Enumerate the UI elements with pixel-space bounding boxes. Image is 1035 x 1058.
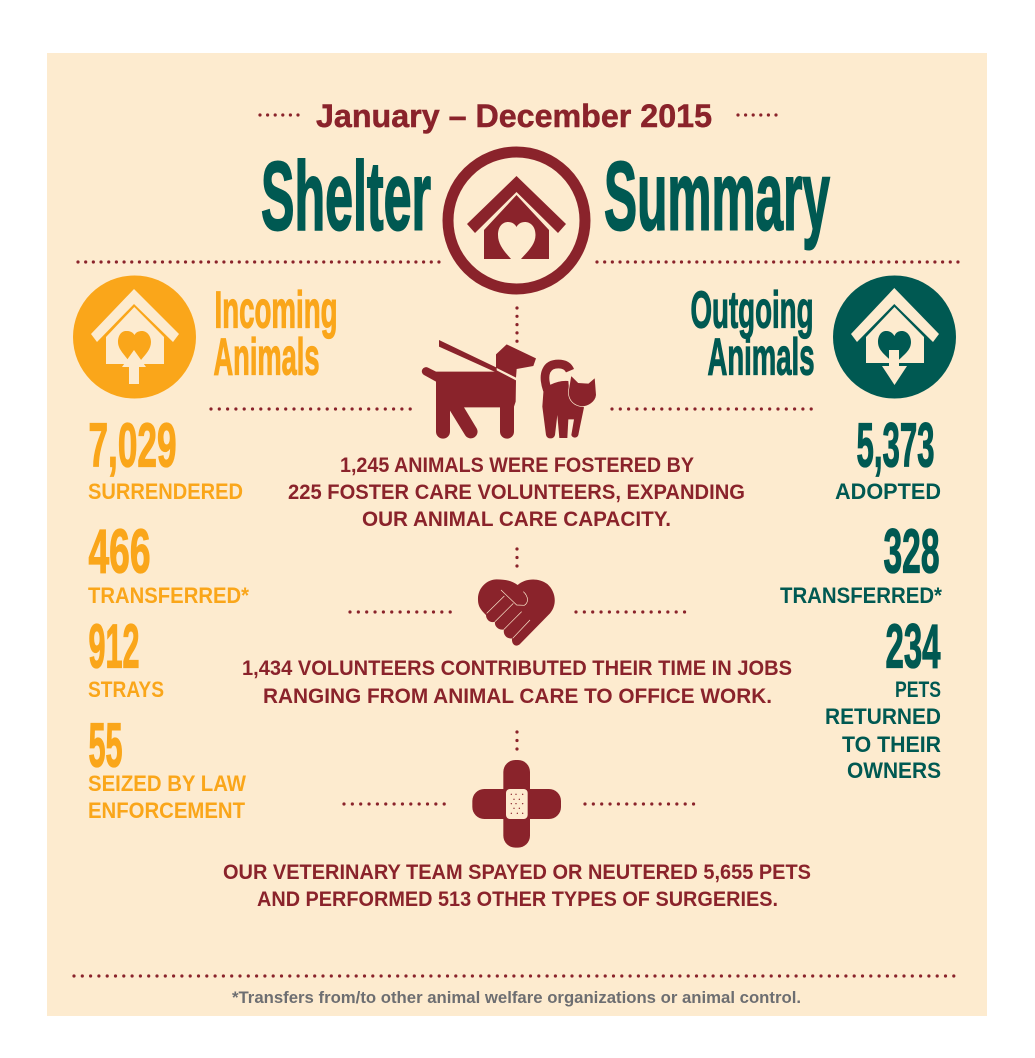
incoming stats: ENFORCEMENT <box>88 798 246 823</box>
outgoing stats: 5,373 <box>856 412 934 480</box>
title: Summary <box>604 142 830 250</box>
incoming stats: TRANSFERRED* <box>88 583 249 608</box>
icon: shelter house in ring <box>448 152 585 289</box>
heading: incoming animals <box>214 282 338 386</box>
title rules <box>78 260 439 264</box>
text: veterinary team <box>223 861 811 911</box>
text: foster care: 225 FOSTER CARE VOLUNTEERS, EXPANDING <box>288 481 745 504</box>
incoming stats: 7,029 <box>88 412 176 480</box>
outgoing stats: RETURNED <box>825 704 941 729</box>
text: foster care: OUR ANIMAL CARE CAPACITY. <box>362 508 671 531</box>
incoming stats: SURRENDERED <box>88 479 243 504</box>
icon: outgoing house <box>833 276 956 398</box>
incoming stats <box>88 412 249 823</box>
footnote: *Transfers from/to other animal welfare organizations or animal control. <box>232 988 801 1007</box>
incoming stats: STRAYS <box>88 677 164 702</box>
incoming stats: 466 <box>88 518 150 586</box>
text: foster care: 1,245 ANIMALS WERE FOSTERED BY <box>340 454 694 477</box>
text: veterinary team: AND PERFORMED 513 OTHER TYPES OF SURGERIES. <box>257 888 778 911</box>
text: volunteers: RANGING FROM ANIMAL CARE TO OFFICE WORK. <box>263 685 772 708</box>
heart side rules <box>350 610 452 614</box>
date heading: January – December 2015 <box>316 98 712 134</box>
heading: outgoing animals <box>690 282 814 386</box>
heading: outgoing animals: Outgoing <box>690 282 814 340</box>
outgoing stats: TO THEIR <box>842 732 941 757</box>
dog and cat side rules <box>211 407 418 411</box>
bandage side rules <box>344 802 446 806</box>
text: volunteers <box>242 657 792 708</box>
vertical dots under ring <box>515 308 519 342</box>
incoming stats: 912 <box>88 612 140 682</box>
icon: dog and cat <box>422 340 596 439</box>
incoming stats: SEIZED BY LAW <box>88 771 246 796</box>
icon: bandage <box>472 760 561 848</box>
outgoing stats: ADOPTED <box>835 479 941 504</box>
footer rule <box>74 974 956 978</box>
heading: outgoing animals: Animals <box>708 328 814 386</box>
title <box>261 142 830 250</box>
incoming stats: 55 <box>88 712 122 780</box>
heading: incoming animals: Animals <box>214 328 320 386</box>
vertical dots above bandage <box>515 732 519 750</box>
outgoing stats: PETS <box>895 677 941 702</box>
outgoing stats: 328 <box>884 518 940 586</box>
outgoing stats: OWNERS <box>847 758 941 783</box>
outgoing stats <box>780 412 942 783</box>
text: volunteers: 1,434 VOLUNTEERS CONTRIBUTED THEIR TIME IN JOBS <box>242 657 792 680</box>
icon: handshake heart <box>478 579 555 646</box>
outgoing stats: 234 <box>886 612 941 682</box>
title: Shelter <box>261 142 431 250</box>
outgoing stats: TRANSFERRED* <box>780 583 942 608</box>
vertical dots above heart <box>515 549 519 567</box>
text: foster care <box>288 454 745 531</box>
heading: incoming animals: Incoming <box>214 282 338 340</box>
icon: incoming house <box>73 276 196 398</box>
text: veterinary team: OUR VETERINARY TEAM SPAYED OR NEUTERED 5,655 PETS <box>223 861 811 884</box>
